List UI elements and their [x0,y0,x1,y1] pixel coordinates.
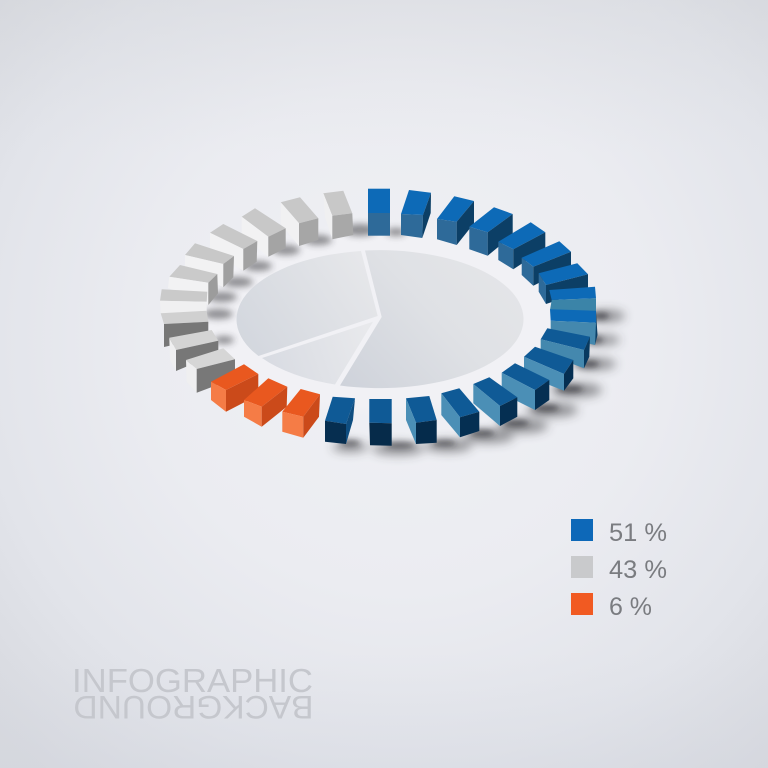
pie slice: blue 51% [340,250,524,388]
pie slice: orange 6% [262,322,373,384]
legend item: grey 43%: 43 % [609,556,667,584]
pie chart [237,250,524,388]
pie slice: grey 43% [237,251,378,356]
block shadows [203,224,625,455]
ring of blue blocks [325,189,598,446]
light ring around pie [194,227,564,411]
legend item: blue 51%: 51 % [609,519,667,547]
legend [571,519,667,621]
mirrored title: BACKGROUND: BACKGROUND [74,689,314,725]
title: INFOGRAPHIC: INFOGRAPHIC [72,662,313,699]
legend item: orange 6%: 6 % [609,593,652,621]
ring of orange blocks [211,364,320,438]
ring of grey blocks [160,191,353,393]
